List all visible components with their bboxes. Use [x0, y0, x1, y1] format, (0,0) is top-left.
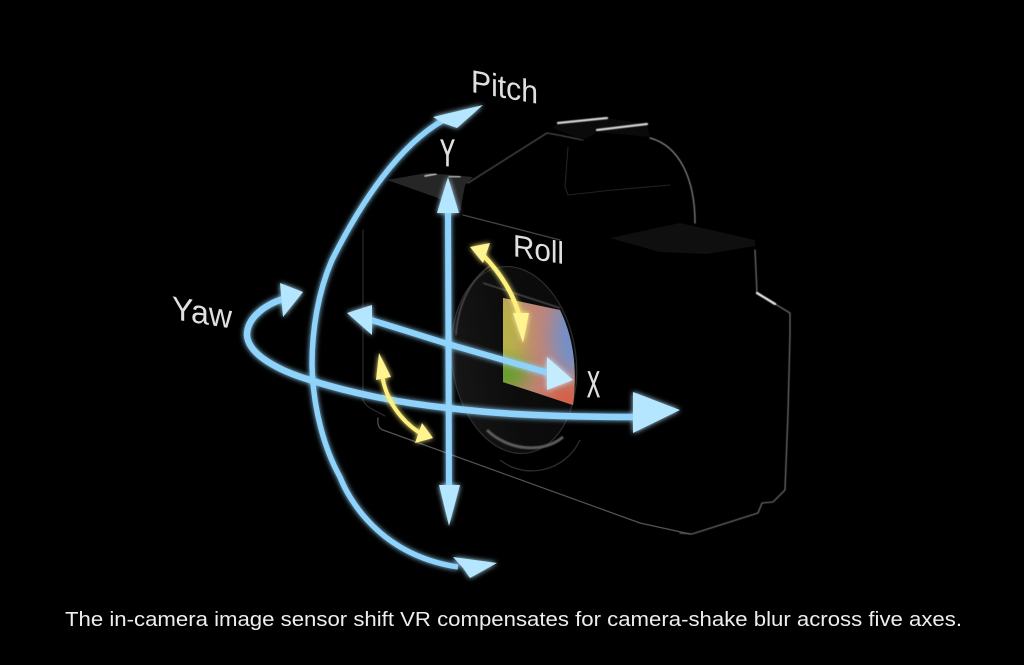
- Y axis arrow: [437, 177, 460, 526]
- top plate with dials: [387, 173, 473, 213]
- label: Y: Y: [440, 133, 455, 175]
- label: X: X: [587, 364, 600, 405]
- label: Yaw: Yaw: [172, 290, 233, 337]
- outer rings: [500, 440, 580, 471]
- lens mount: [440, 258, 588, 471]
- base line: [378, 418, 690, 534]
- hot shoe: [553, 118, 650, 140]
- eyepiece arc: [650, 138, 695, 223]
- image sensor: [503, 298, 575, 405]
- Pitch arrow: [312, 105, 497, 578]
- grip top: [610, 223, 755, 254]
- caption: The in-camera image sensor shift VR compensates for camera-shake blur across five axes.: [65, 609, 962, 631]
- Roll arrow: [470, 243, 529, 343]
- prism edge: [468, 133, 583, 183]
- lower-left yellow arrow: [376, 353, 433, 443]
- right edge: [680, 250, 790, 534]
- hot shoe highlights: [558, 118, 647, 130]
- Yaw arrow: [247, 283, 680, 433]
- dial buttons: [425, 174, 460, 177]
- sensor chamber top edge: [483, 283, 560, 308]
- lower mount crescent: [487, 430, 563, 448]
- left edge: [363, 230, 385, 416]
- upper mount highlight: [456, 266, 490, 335]
- label: Pitch: Pitch: [471, 63, 538, 111]
- prism inner details: [565, 147, 670, 195]
- camera body silhouette: [363, 118, 790, 534]
- X axis arrow: [347, 305, 573, 390]
- label: Roll: Roll: [513, 228, 564, 271]
- body line under prism: [463, 215, 560, 240]
